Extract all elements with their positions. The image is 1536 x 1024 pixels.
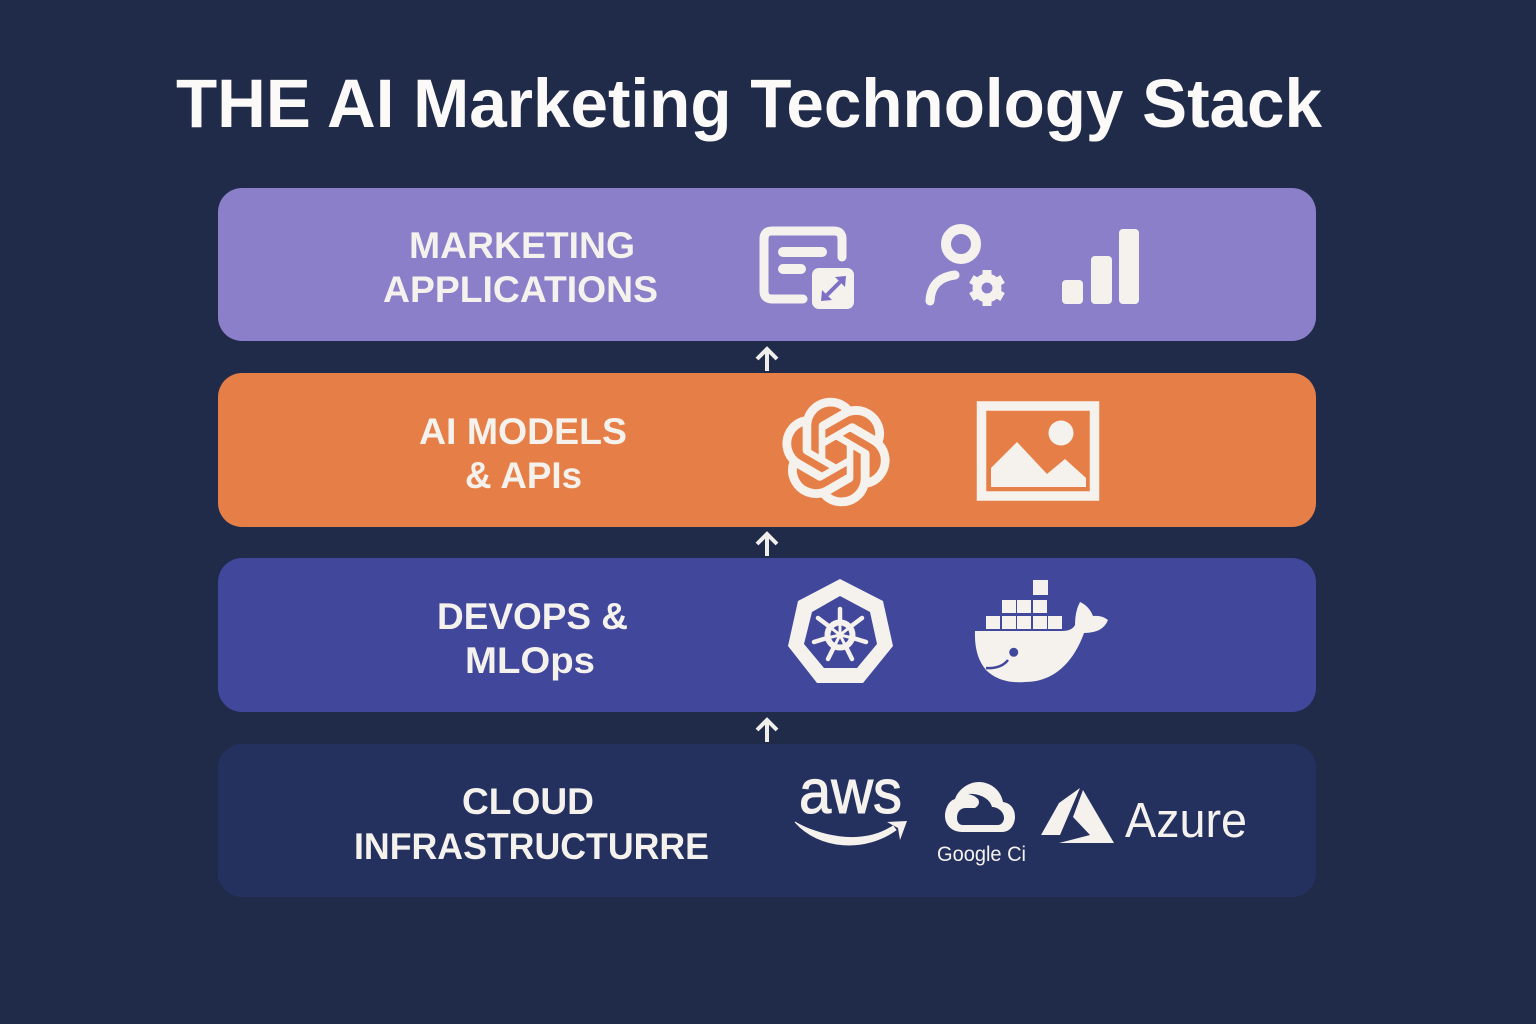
arrow: devops to models <box>757 534 777 556</box>
label: ai models and apis: AI MODELS <box>419 411 627 452</box>
panel: marketing applications <box>218 188 1316 341</box>
label: cloud infrastructure <box>354 781 709 867</box>
icon: image <box>982 406 1094 496</box>
label: cloud infrastructure: CLOUD <box>462 781 594 822</box>
icon: openai knot <box>783 399 889 505</box>
label: marketing applications: APPLICATIONS <box>383 269 658 310</box>
label: devops and mlops <box>437 596 628 681</box>
panel: ai models and apis <box>218 373 1316 527</box>
panel: devops and mlops <box>218 558 1316 712</box>
label: devops and mlops: MLOps <box>465 640 595 681</box>
icon: document editor <box>764 231 854 309</box>
arrow: cloud to devops <box>757 720 777 742</box>
arrow: models to applications <box>757 349 777 371</box>
icon: docker whale <box>975 580 1108 682</box>
logo: azure <box>1041 788 1247 848</box>
panel: cloud infrastructure <box>218 744 1316 897</box>
label: marketing applications <box>383 225 658 310</box>
icon: kubernetes <box>788 579 893 683</box>
title: THE AI Marketing Technology Stack <box>176 65 1323 142</box>
logo: google cloud <box>937 782 1026 866</box>
label: marketing applications: MARKETING <box>409 225 635 266</box>
label: cloud infrastructure: INFRASTRUCTURRE <box>354 826 709 867</box>
logo: aws: aws <box>799 758 902 827</box>
label: devops and mlops: DEVOPS & <box>437 596 628 637</box>
logo: azure: Azure <box>1125 794 1247 848</box>
logo: google cloud: Google Ci <box>937 843 1026 866</box>
label: ai models and apis: & APIs <box>465 455 582 496</box>
icon: bar signal <box>1062 229 1139 304</box>
label: ai models and apis <box>419 411 627 496</box>
icon: user with gear <box>930 229 1003 306</box>
